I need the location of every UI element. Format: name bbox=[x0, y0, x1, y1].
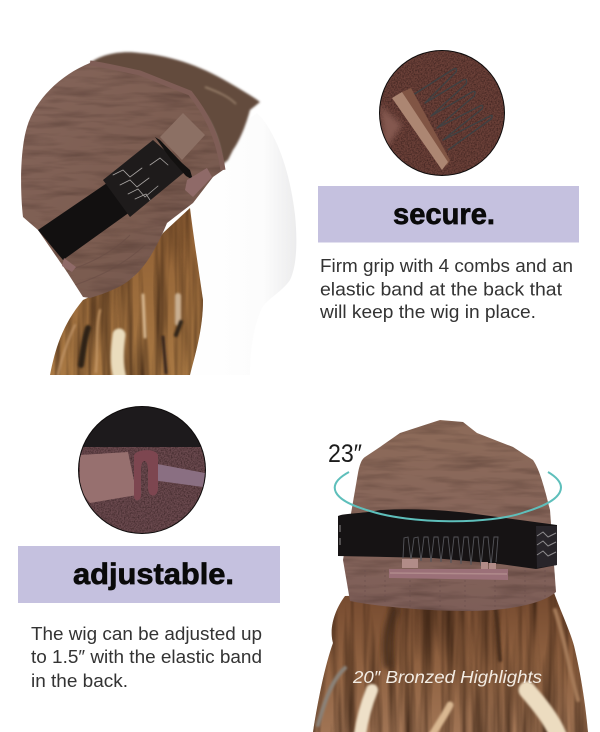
text: secure description: Firm grip with 4 combs and an bbox=[320, 256, 573, 276]
banner: adjustable bbox=[18, 546, 280, 603]
text: adjustable description: The wig can be adjusted up bbox=[31, 624, 262, 644]
elastic band bbox=[338, 509, 557, 569]
text: adjustable description: in the back. bbox=[31, 671, 128, 691]
text: secure description: elastic band at the back that bbox=[320, 280, 562, 300]
hair below cap bbox=[50, 208, 203, 378]
hook tab bbox=[185, 168, 212, 197]
arrow: circumference ring bbox=[335, 472, 561, 521]
comb bbox=[389, 537, 508, 580]
heading: adjustable.: adjustable. bbox=[73, 558, 234, 591]
circle: comb close-up bbox=[378, 50, 506, 178]
photo: side view of wig on mannequin bbox=[21, 52, 296, 378]
cap bbox=[21, 63, 223, 298]
front hair / lace crown bbox=[90, 52, 260, 165]
mannequin head bbox=[185, 113, 296, 375]
banner: secure bbox=[318, 186, 579, 242]
photo: back view of wig bbox=[313, 420, 588, 732]
label: 23 inch circumference: 23″ bbox=[328, 440, 362, 468]
circle: adjuster hook close-up bbox=[78, 406, 206, 534]
label: hair length and colour: 20″ Bronzed Highlights bbox=[352, 667, 542, 687]
elastic band bbox=[38, 183, 130, 260]
text: secure description: will keep the wig in place. bbox=[319, 302, 536, 322]
text: secure description bbox=[319, 256, 573, 322]
heading: secure.: secure. bbox=[393, 198, 495, 231]
cap bbox=[343, 420, 556, 611]
text: adjustable description bbox=[31, 624, 262, 691]
hair bbox=[313, 590, 588, 732]
comb tab bbox=[160, 113, 205, 160]
text: adjustable description: to 1.5″ with the elastic band bbox=[31, 647, 262, 667]
